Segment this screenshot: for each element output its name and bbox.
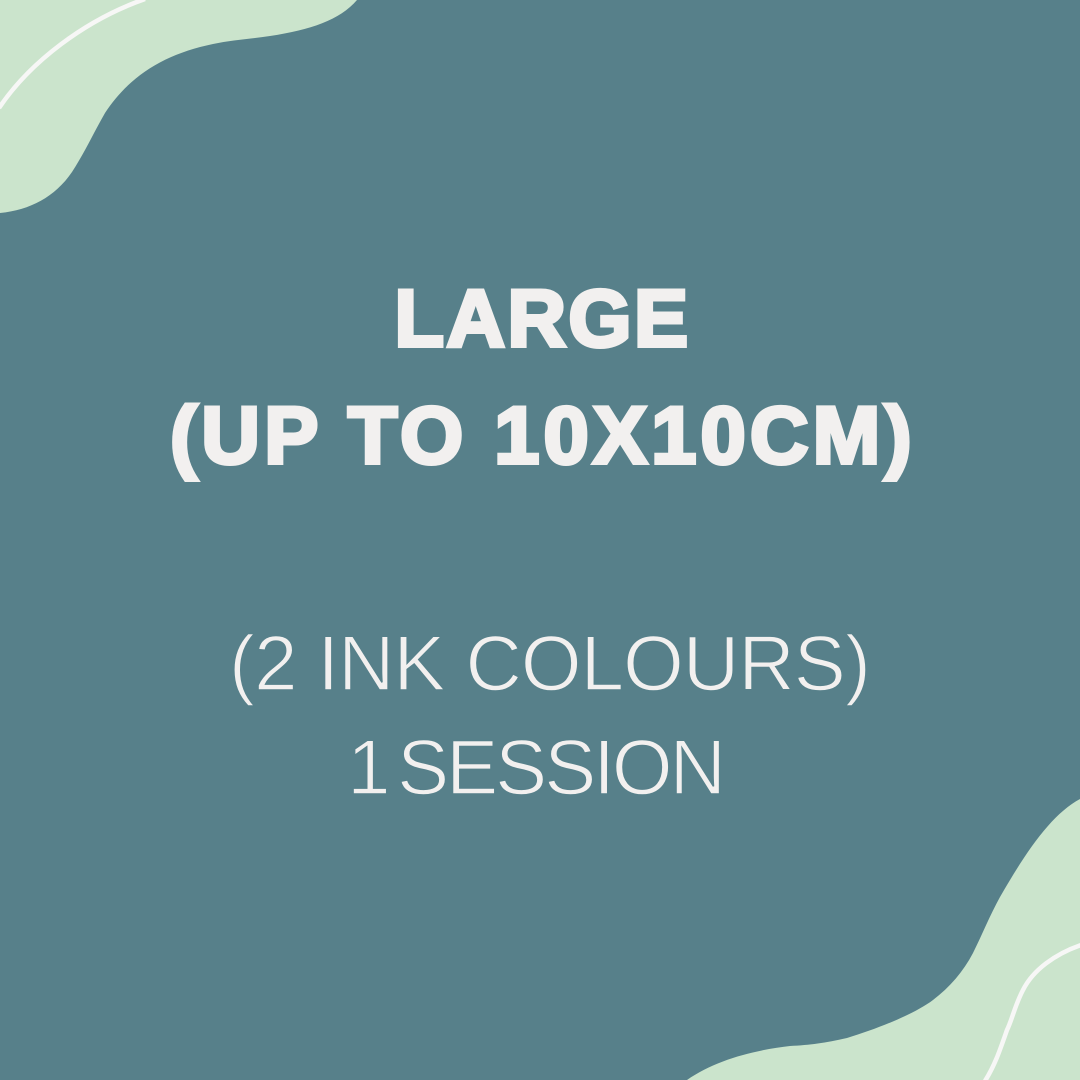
shape: bottom-right blob [687,799,1080,1080]
text block: ink colours and sessions: (2 INK COLOURS) [229,619,870,707]
heading: product size: LARGE [394,274,690,364]
shape: top-left blob [0,0,357,213]
text block: ink colours and sessions: 1 SESSION [347,723,723,811]
heading: product size: (UP TO 10X10CM) [170,391,916,481]
text block: ink colours and sessions [229,619,870,811]
heading: product size [170,274,916,482]
